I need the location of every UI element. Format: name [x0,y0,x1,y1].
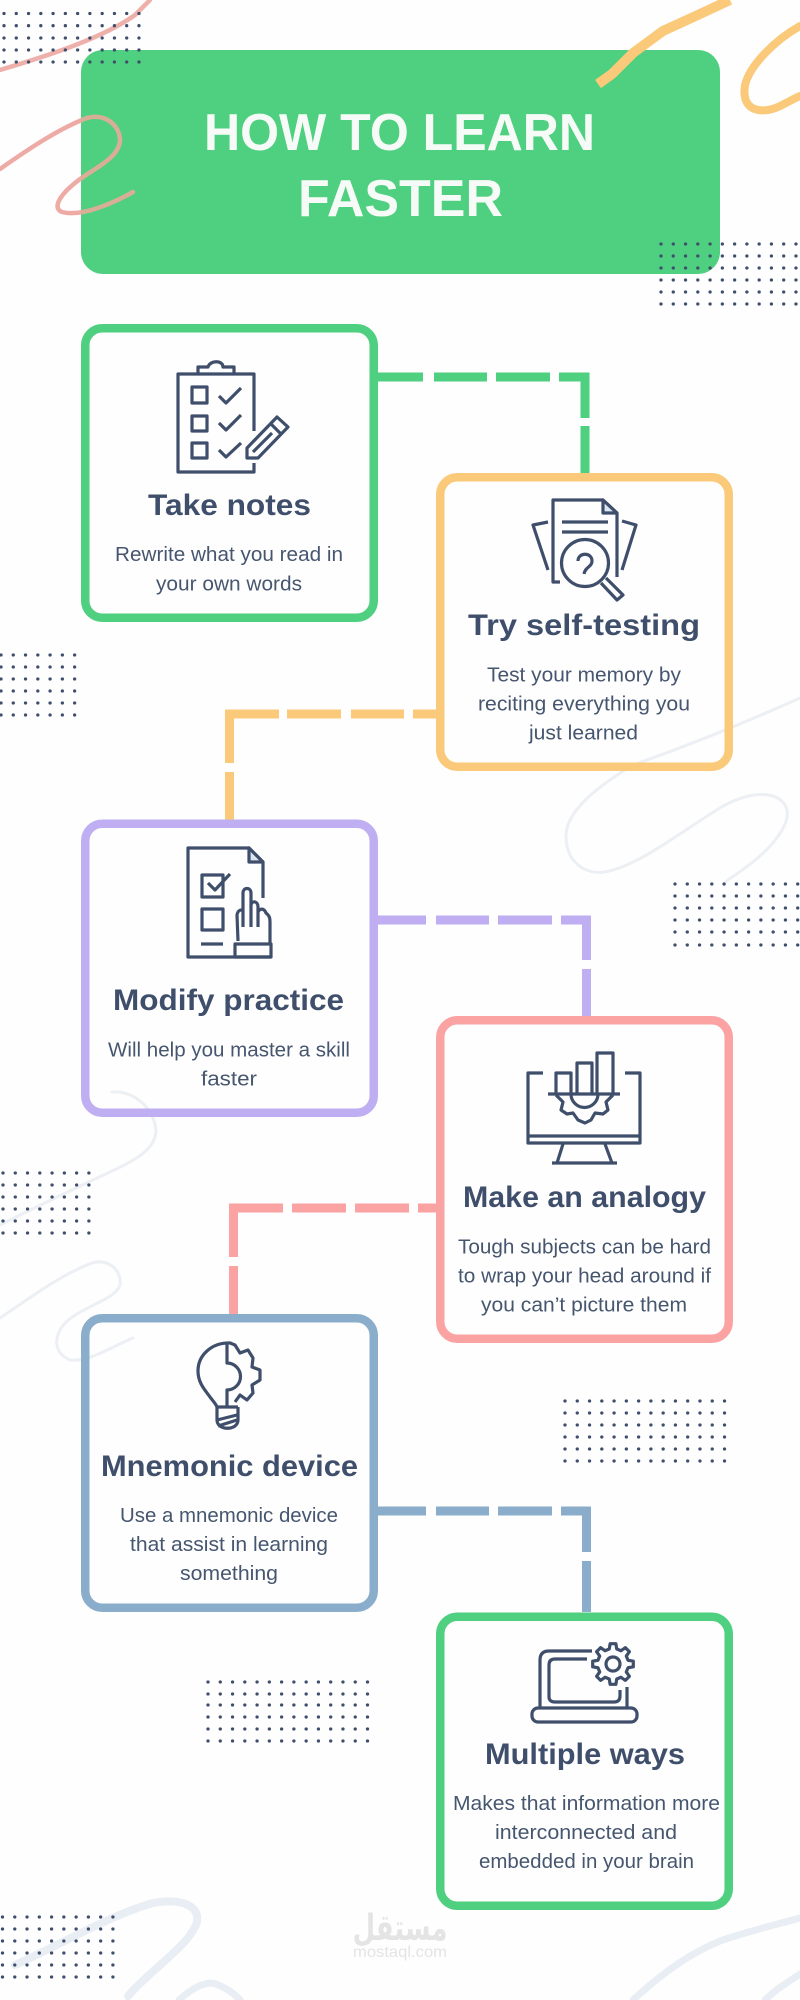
panel: Try self-testing [440,477,729,767]
scribble: pink top [0,0,150,70]
description: just learned [528,722,638,744]
scribble: pink squiggle [0,117,133,213]
description [108,1038,350,1090]
background scribbles (grey) [0,698,800,2000]
card border [85,328,374,618]
connector: analogy to mnemonic [234,1208,436,1314]
scribble: orange loop [744,26,800,110]
description [120,1504,338,1585]
card border [440,1617,729,1906]
description [478,664,690,744]
card border [440,1020,729,1339]
description: Makes that information more [453,1792,720,1815]
description: faster [201,1068,257,1090]
title: FASTER [298,170,503,228]
heading: Try self-testing [468,609,700,642]
icon: documents and magnifier [533,500,636,600]
description: reciting everything you [478,692,690,716]
description [115,543,343,596]
title: HOW TO LEARN [204,104,595,162]
icon: monitor with chart and gear [528,1053,640,1163]
description: Use a mnemonic device [120,1504,338,1527]
icon: light bulb with gear [198,1343,260,1428]
description: interconnected and [495,1821,677,1844]
description: Rewrite what you read in [115,543,343,566]
connector: self-testing to modify practice [230,714,436,820]
description: Tough subjects can be hard [458,1236,711,1258]
scribble: orange stroke [598,0,730,84]
description: that assist in learning [130,1533,328,1556]
card border [440,477,729,767]
description: something [180,1562,278,1585]
icon: laptop with gear [532,1644,637,1722]
title [204,104,595,228]
heading: Take notes [148,489,311,522]
description: you can’t picture them [481,1294,687,1316]
heading: Multiple ways [485,1738,685,1771]
icon: form with pointing hand [188,848,271,957]
watermark: مستقل [353,1908,447,1949]
heading: Mnemonic device [101,1450,358,1483]
panel: Modify practice [85,824,374,1113]
description: to wrap your head around if [458,1264,711,1288]
card border [85,824,374,1113]
description [453,1792,720,1873]
panel: Take notes [85,328,374,618]
description: your own words [156,572,302,596]
description [458,1236,711,1316]
panel: Multiple ways [440,1617,729,1906]
connector: notes to self-testing [378,377,585,473]
connector: modify practice to analogy [378,920,586,1016]
description: Test your memory by [487,664,682,686]
panel: Mnemonic device [85,1318,374,1608]
card border [85,1318,374,1608]
heading: Make an analogy [463,1181,706,1214]
connector: mnemonic to multiple ways [378,1511,586,1612]
heading: Modify practice [113,984,344,1017]
panel: Make an analogy [440,1020,729,1339]
title banner [81,50,720,274]
description: embedded in your brain [479,1850,694,1873]
description: Will help you master a skill [108,1038,350,1062]
watermark: mostaql.com [353,1944,447,1961]
icon: checklist and pencil [178,362,288,472]
